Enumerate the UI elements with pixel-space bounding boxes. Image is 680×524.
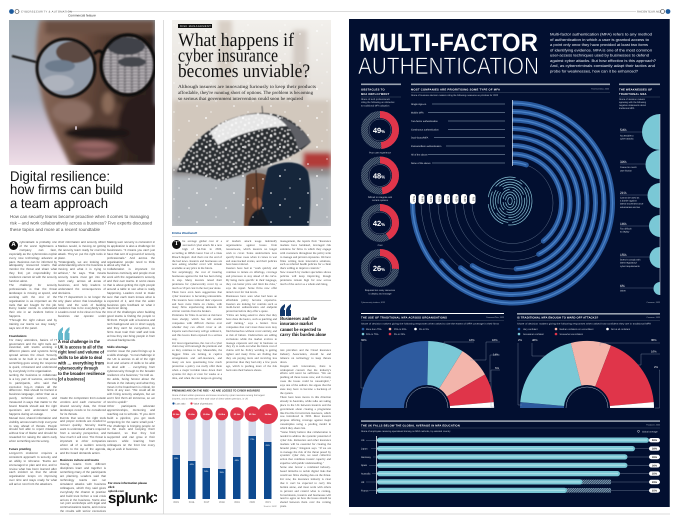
country labels: Japan [361, 448, 368, 450]
confidence description: Share of decision makers giving the following responses when asked how confident they are in traditional MFA [517, 322, 652, 326]
obstacles heading [361, 88, 390, 96]
page header and rules: RACONTEUR.NET [637, 10, 662, 14]
weakness values and descriptions: 6% [620, 284, 625, 288]
weakness values and descriptions: Other [620, 290, 626, 292]
premium values: $1.8bn [219, 413, 226, 416]
quote text: cybersecurity through [58, 366, 98, 371]
priority labels and leader lines [411, 103, 442, 165]
obstacles description: to traditional MFA adoption [361, 104, 390, 108]
obstacles description: Share of tech professionals [361, 98, 391, 101]
middle headline: cyber insurance [178, 46, 278, 66]
middle article column 3 bottom: There have been moves in this direction already in Australia, while talks are taking place in the UK between insurers and the government about creating a programme like Pool Re for terrorism insurance, which was introduced in 1993. Most insurers propose offering coverage against major catastrophes using a pooling model in which they share risk. [280, 395, 331, 430]
weakness values and descriptions: user friction [620, 170, 633, 172]
left article column 1: A [11, 242, 16, 248]
stacked bars [172, 412, 272, 499]
chart title: PREMIUMS ARE ON THE RISE – AS ARE LOSSES TO CYBER INSURERS [172, 388, 260, 392]
quote text: [of a business] [58, 376, 85, 381]
weakness values and descriptions: latest regulatory/ [620, 262, 637, 264]
page header and rules: CYBERSECURITY & AUTOMATION [21, 10, 72, 14]
year axis [173, 501, 271, 504]
priority labels and leader lines: Continuous authentication [411, 128, 439, 132]
weaknesses source: Ponemon, 2022 [647, 301, 660, 304]
middle headline: What happens if [178, 30, 295, 51]
bar value connectors and pills: 56% [652, 439, 658, 442]
left standfirst: these topics and more at a recent roundtable [10, 227, 101, 232]
left article column 2 top [58, 241, 106, 319]
weakness values and descriptions: Cannot be used as [620, 196, 640, 200]
quote text [280, 316, 327, 338]
weaknesses description: agreeing with the following [619, 101, 647, 104]
premium values: $2.1bn [234, 413, 241, 416]
weaknesses description [619, 98, 647, 110]
middle article column 2: "Firms are being asked to show that they have done the basics, such as patching and staff training," says a broker. Now companies that can't meet these tests may find themselves without cover entirely, and at risk of failure. Underwriters are adding exclusions while the market evolves to manage exposure and stay in business as they try to work out what the future cost of claims will be. Policy wording is getting tighter and many firms are finding that they are paying more and receiving less protection than they had only a few years ago, which is pushing more of the risk back onto their balance sheets. [226, 313, 277, 372]
quote mark [280, 304, 291, 316]
middle standfirst: affordable, they're running short of options. The problem is becoming [178, 90, 314, 96]
weakness values and descriptions: 21% [620, 191, 627, 195]
usage callouts [361, 342, 500, 407]
icon: fingerprint [488, 177, 532, 225]
panel: multi-factor authentication infographic [349, 19, 670, 507]
radial bar value pills: 43% [454, 196, 458, 202]
intro text: Multi-factor authentication (MFA) refers to any method [550, 32, 652, 36]
left article column 1: Future proofing [9, 447, 31, 451]
quote text [58, 339, 105, 382]
panel: MFA education by country [361, 420, 660, 494]
year axis: 2016 [189, 501, 195, 504]
loss ratio values: 46% [190, 463, 194, 466]
pull quote: skills [58, 327, 105, 382]
loss ratio values: 48% [235, 459, 239, 462]
education legend: Global average [642, 430, 658, 433]
left article column 1: "Through the right culture and by training our teams we stay ready," says one of the panel. [9, 318, 57, 330]
left standfirst: How can security teams become proactive when it comes to managing [10, 214, 150, 219]
loss ratio values: 34% [204, 470, 208, 473]
left article column 1: Long-term resilience requires a consistent approach to security and an ability to rehearse. Teams are encouraged to plan and test, and to review what has been learned after each incident so that the whole organisation keeps on improving over time and stays ready for what will arrive next from the attackers. [9, 451, 57, 486]
country labels: US [361, 439, 365, 442]
country labels [361, 439, 372, 492]
radial bar value pills: 39% [463, 196, 467, 202]
middle standfirst: so serious that government intervention could soon be required [178, 96, 304, 102]
left headline: Digital resilience: [10, 168, 110, 184]
weaknesses heading: THE WEAKNESSES OF [619, 88, 652, 92]
radial bar value pills: 49% [446, 196, 450, 202]
bar value connectors and pills: 38% [652, 448, 658, 451]
page header and rules: Commercial feature [68, 14, 96, 18]
intro text: And, as cybercriminals constantly adapt their tactics and [550, 64, 655, 68]
pull quote: insurance [280, 300, 331, 344]
priorities source: Ponemon/Okta, 2022 [591, 88, 609, 90]
premium values: $4.8bn [265, 413, 272, 416]
infographic title: MULTI-FACTOR [359, 29, 538, 57]
bar value connectors and pills: 35% [652, 473, 658, 476]
half circles [642, 114, 660, 295]
radial bar value pills: 6% [472, 197, 476, 201]
panel: is traditional MFA enough: Ponemon, 2022 [647, 316, 660, 319]
left article column 2 top: "Strategically, we are looking and understanding where the business is moving and what it is trying to achieve," he says. That means security teams must get into the room early, across all areas of business, and help leaders to understand the consequences of decisions. [58, 260, 106, 295]
weakness values and descriptions: lateral movement once [620, 202, 644, 206]
quote text: insurance market [280, 321, 313, 327]
intro text [550, 32, 656, 74]
donut: resources required: to deploy and manage [369, 292, 392, 296]
usage legend: 25% to 50% [394, 328, 406, 331]
middle standfirst: Although insurers are innovating furiously to keep their products [178, 84, 316, 90]
radial bar chart [412, 103, 612, 303]
middle article column 3 bottom: Despite such innovations, there is widespread concern that the industry's efforts will never be sufficient. "We are pushing all these issues now, and in many cases the losses could be catastrophic," says one of the authors. He argues that the state may have to become a backstop of the system. [280, 364, 331, 395]
panel: use of traditional MFA across organisations: 16% [469, 338, 475, 342]
usage legend [362, 328, 429, 336]
left article column 1: cyberattack is probably one of the worst nightmares a company can face, especially as the cybercrooks exploit every new technology advance at pace. Business can be informed by adequately resourced teams that monitor the threat and share what they find, yet responsibility for resilience cannot sit with the security function alone. [9, 241, 57, 283]
middle article column 2: Insurers have had to "work quickly and continue to iterate on offerings, coverage and processes to stay ahead of the curve. By being more specific in their language, they can better price and limit the risks," says the report. Some firms now offer tiered cover for risk levels. [226, 266, 277, 294]
weakness values and descriptions: 16% [620, 222, 627, 226]
donut: difficult to integrate: Difficult to integrate with [368, 196, 393, 199]
weakness values and descriptions: Too difficult [620, 228, 632, 230]
quote text: cannot be expected to [280, 327, 321, 333]
gap to global average [565, 480, 611, 493]
panel: is traditional MFA enough: 2% [518, 338, 523, 342]
priority labels and leader lines: None of the above [411, 162, 431, 165]
weakness values and descriptions: to deploy [620, 230, 630, 234]
section tag [178, 24, 212, 28]
donut: cost: Cost [378, 244, 383, 247]
priority labels and leader lines: Passwordless authentication [411, 145, 442, 148]
usage heading: THE USE OF TRADITIONAL MFA ACROSS ORGANISATIONS [361, 316, 447, 320]
obstacles heading: MFA DEPLOYMENT [361, 93, 390, 96]
intro text: of identifying evidence. MFA is one of the most common [550, 48, 652, 52]
confidence legend: Very confident [523, 328, 538, 331]
confidence legend: Somewhat unconfident [560, 333, 583, 336]
premium values: $2.7bn [249, 413, 256, 416]
photo: man wearing glasses reflecting code [9, 20, 155, 165]
intro text: user-access techniques used by businesses to defend [550, 54, 649, 58]
premium circles [172, 404, 278, 424]
panel: use of traditional MFA across organisations: 10% [492, 338, 498, 342]
panel: use of traditional MFA across organisations: Ponemon/Okta, 2022 [486, 316, 504, 319]
left article column 3 [107, 241, 155, 451]
weakness values and descriptions: 15% [620, 253, 627, 257]
confidence legend: Not at all confident [611, 328, 630, 331]
quote mark [58, 327, 70, 340]
left standfirst: risk – and work collaboratively across a business? Five experts discussed [10, 220, 153, 226]
weakness values and descriptions: cyber attacks [620, 138, 634, 140]
radial bar value pills: 75% [412, 196, 416, 202]
middle article column 3 bottom: "Some firmly believe that collaboration is needed to address the systemic potential of cyber risk. Reinsurers and other insurance markets will be essential for creating the broader plans," Kingston says. "If we are to manage the risk of the threat posed by systemic cyber risk, we need collective action that combines insurer capacity and expertise with public understanding." [280, 430, 331, 465]
quote text: skills to be able to deal [58, 355, 102, 360]
chart legend: Loss ratio [176, 402, 186, 406]
premium values: $1.6bn [203, 413, 211, 416]
left article column 1 [9, 241, 57, 486]
middle article column 2: Businesses have seen what had been an affordable policy become expensive. Insurers are looking for controls such as multi-factor authentication and endpoint protection before they offer a quote. [226, 294, 277, 313]
panel: companies prioritising MFA [410, 84, 612, 303]
country labels: Australia [361, 472, 371, 475]
donut: difficult to integrate [364, 160, 396, 202]
source: Source: NAIC [264, 505, 277, 508]
loss ratio values: 65% [266, 444, 270, 447]
usage legend: More than 75% [366, 328, 382, 331]
panel: use of traditional MFA across organisations: 5% [495, 366, 500, 370]
radial bar value pills: 59% [438, 196, 442, 202]
sponsor block: splunk [108, 481, 157, 506]
panel: MFA education by country: Proofpoint, 2022 [646, 424, 660, 426]
quote text: carry this burden alone [280, 332, 327, 338]
education heading: THE UK FALLS BELOW THE GLOBAL AVERAGE IN MFA EDUCATION [361, 424, 460, 428]
country labels: Germany [361, 456, 372, 459]
confidence callouts [518, 343, 660, 408]
priority labels and leader lines: Two-factor authentication [411, 120, 438, 123]
premium values: $1.1bn [173, 413, 180, 416]
middle article column 3 top [280, 240, 331, 286]
chart description: insurers, and an estimate of the total value of direct written premium, in US [172, 398, 248, 400]
photo: couple under a snow-covered umbrella [172, 20, 331, 226]
intro text: of authentication in which a user is granted access to [550, 38, 649, 42]
quote text: Businesses and the [280, 316, 318, 322]
left article column 2 bottom [60, 397, 106, 512]
infographic title: AUTHENTICATION [358, 53, 539, 80]
education description: Share of employees receiving specialised training on MFA methods, by selected country [361, 430, 451, 433]
chart: premiums on the rise [172, 386, 278, 508]
middle headline [178, 30, 310, 82]
left headline [10, 168, 123, 211]
donut: cost [364, 208, 396, 247]
panel: weaknesses of traditional MFA [619, 84, 660, 304]
year axis: 2017 [204, 501, 210, 504]
left article column 3: Skills shortage [107, 345, 128, 349]
obstacles heading: OBSTACLES TO [361, 88, 385, 92]
middle article column 3 bottom [280, 349, 331, 508]
left article column 3: Another issue the panel brings up is a skills shortage. "A real challenge in the UK is access to all of the right level and volume of skills to be able to deal with … everything from cybersecurity through to the broader resilience of a business," he told us. [107, 349, 155, 377]
donut: difficult to integrate: current systems [372, 199, 389, 202]
donut: cost: 42% [373, 219, 385, 228]
sponsor note: splunk.com [108, 489, 124, 493]
usage legend: 0% to 5% [419, 328, 429, 331]
weakness values and descriptions: a barrier against [620, 200, 637, 202]
panel: is traditional MFA enough: 2% [654, 365, 659, 369]
horizontal bars [377, 438, 649, 493]
priority labels and leader lines: Dual-factor/MFA [411, 136, 429, 140]
weakness values and descriptions: Cause too much [620, 166, 637, 169]
education legend [638, 430, 658, 433]
country labels: UK [361, 481, 365, 484]
priorities heading: MOST COMPANIES ARE PRIORITISING SOME TYPE OF MFA [411, 88, 500, 92]
loss ratio values [174, 438, 270, 474]
radial bar value pills [410, 194, 476, 204]
bar value connectors and pills [611, 438, 660, 493]
byline: Emma Woollacott [172, 231, 197, 235]
left article column 1: For many attendees, basics of IT governance and the right tools are essential, with teams working in different places and systems being spread across the cloud. Security needs to be built in so that when something goes wrong the response is quick, rehearsed and understood by everybody in the organisation. [9, 338, 57, 373]
left article column 3: One of the challenges when building good teams is finding the people to fill them. People with a business and tech background are in short supply and they can't be everywhere, so firms must train their staff and look at how they can bring people in from unusual backgrounds. [107, 310, 155, 342]
sponsor note [108, 481, 147, 493]
middle article column 3 bottom: Some also favour a combined industry-based initiative to tackle digital risks that would see firms sharing data on the threat. For now, the insurance industry is clear that it can't be expected to carry this burden alone, and must work with others to prevent and control what is coming. Governments, insurers and businesses will need to agree on how the losses should be shared between them over the coming years. [280, 465, 331, 508]
donut: resources required: 26% [373, 264, 385, 273]
weaknesses heading [619, 88, 652, 96]
country labels: France [361, 490, 369, 492]
year axis: 2019 [234, 501, 240, 504]
left article column 1: Foundations [9, 334, 27, 338]
weakness values and descriptions [620, 128, 654, 292]
left headline: how firms can build [10, 181, 123, 197]
weaknesses description: traditional MFA [619, 107, 635, 110]
year axis: 2021 [265, 501, 271, 504]
chart legend: Value of premiums [194, 402, 213, 406]
priority labels and leader lines: Single sign-on [411, 103, 427, 106]
sponsor note: For more information please click [108, 481, 147, 489]
bar value connectors and pills: 36% [652, 464, 658, 467]
premium values: $1.4bn [188, 413, 196, 416]
weaknesses description: negative statements about [619, 104, 646, 107]
weaknesses description: Share of decision makers [619, 98, 646, 101]
donut: poor user experience [364, 114, 396, 154]
middle article column 1 [172, 240, 222, 381]
left article column 3: He adds, being honest about the threats in the industry and what they mean in the boardroom is critical, for firms of any size. "We could all do with hiring security analysts, but we won't find them all tomorrow, so we need to upskill." [107, 377, 155, 404]
intro text: probe for weaknesses, how can it be enhanced? [550, 70, 638, 74]
radial bar value pills: 64% [420, 196, 424, 202]
loss ratio values: 35% [220, 471, 224, 474]
obstacles description: citing the following as obstacles [361, 101, 395, 104]
panel: use of traditional MFA across organisations: 32% [361, 338, 367, 342]
premium values [173, 413, 272, 416]
middle standfirst [178, 84, 316, 102]
country labels: Spain [361, 464, 368, 467]
weakness values and descriptions: 54% [620, 128, 627, 132]
bar value connectors and pills: 36% [652, 456, 658, 459]
donut: poor user experience: 49% [373, 126, 385, 135]
middle article column 1: Premiums for firms in sectors at risk have risen sharply, which has left smaller companies with difficult choices over whether they can afford cover at all. Experts warn that many will go without it, and this leaves them exposed in a serious way. [172, 313, 222, 341]
weakness values and descriptions: Accessible to [620, 134, 634, 138]
left article column 1: The challenge for security professionals is that the threat landscape is moving at speed, and working with the rest of the organisation is as important as the tools that are bought for the job. Every leader needs to understand their role in an incident before it happens. [9, 283, 57, 318]
intro text: against cyber attacks. But how effective is this approach? [550, 59, 656, 63]
left article column 3: Collaboration is important for business continuity and people must work with the organisation's security and their own teams. In some cases that is about getting the right people around a table to see what is really happening. Leaders need to make sure that each team knows what is expected of it, and that the wider business gets feedback on what it has been doing. [107, 267, 155, 310]
middle article column 1: T [174, 241, 178, 247]
semicircle chart: usage [365, 346, 489, 470]
left article column 2 bottom: Business culture and teams [60, 458, 99, 462]
chart description: Share of direct written premiums and losses incurred by cyber insurance among the largest [172, 394, 265, 397]
confidence legend: Neither confident nor unconfident [560, 328, 594, 331]
year axis: 2015 [173, 501, 179, 504]
chart legend [172, 402, 213, 406]
chart description [172, 394, 265, 400]
year axis: 2018 [219, 501, 225, 504]
obstacles source: Cybersecurity Insiders, 2022 [361, 301, 385, 304]
loss ratio values: 73% [250, 438, 254, 441]
priority labels and leader lines: Mobile MFA [411, 112, 424, 114]
middle article column 1: There have even been suggestions that cyber insurance is becoming uninsurable. The insurers have reduced their exposure and have more limits on claims, with many firms experiencing demands for stricter controls from the brokers. [172, 290, 222, 313]
weakness values and descriptions: 30% [620, 160, 627, 164]
intro text: a point only once they have provided at least two items [550, 43, 648, 47]
loss ratio values: 50% [174, 457, 178, 460]
bar value connectors and pills: 28% [652, 481, 658, 484]
panel: obstacles to MFA deployment [361, 84, 401, 304]
middle article column 1: Not surprisingly, the cost of insuring businesses against the risk has been rising in step. Many insurers raised their premiums for cybersecurity cover by as much as 50 per cent in the last year alone. [172, 270, 222, 290]
section tag: RISK MANAGEMENT [180, 25, 211, 28]
left article column 1: Mutual trust, shared information and visibility across teams help everyone to stay ahead of threats. People should feel able to report mistakes without fear of blame and should be rewarded for raising the alarm early when something seems wrong. [9, 416, 57, 443]
donut: resources required: Required too many resources [365, 289, 396, 292]
usage description: Share of decision makers giving the following responses when asked to cite the extent of MFA coverage in their firms [361, 322, 500, 326]
left headline: a team approach [10, 195, 108, 211]
middle article column 3 top: New research by market specialists shows policies will keep improving, though premiums remain high for now across much of the sector as a whole and rising. [280, 270, 331, 286]
weakness values and descriptions: cyber requirements [620, 265, 641, 268]
priority labels and leader lines: All of the above [411, 154, 428, 156]
left article column 3: Other participants advocate apprenticeships, mentoring and reaching out to schools. "If you don't build a pipeline, you get stuck competing for the same small pool." The challenge is bringing people on to the team and keeping them motivated, so that they feel supported and can grow in their careers while learning from colleagues on the front line every day at work in business. [107, 404, 155, 451]
confidence legend [518, 328, 630, 336]
radial bar value pills: 61% [429, 196, 433, 202]
panel: use of traditional MFA across organisations: 14% [493, 352, 499, 356]
left article column 1: Getting the business to collaborate is a key part of success, according to participants, who said that executive buy-in makes all the difference. Risk should be framed in business language, rather than as a purely technical concern, and measured in ways that matter to the board. Boards should ask the right questions and understand what happens during an outage. [9, 373, 57, 416]
weakness values and descriptions: Doesn't comply with [620, 258, 641, 262]
usage legend: 50% to 75% [366, 333, 378, 336]
weaknesses heading: TRADITIONAL MFA [619, 93, 647, 96]
weakness values and descriptions: adversaries are live [620, 206, 641, 209]
obstacles description [361, 98, 395, 108]
middle article column 2 [226, 240, 277, 372]
left standfirst [10, 214, 153, 232]
panel: is traditional MFA enough: 16% [651, 350, 657, 354]
confidence legend: Somewhat confident [523, 333, 544, 336]
bar value connectors and pills: 25% [652, 490, 658, 492]
panel: is traditional MFA enough [517, 313, 660, 466]
donut: difficult to integrate: 48% [373, 172, 385, 180]
panel: use of traditional MFA across organisations [361, 313, 504, 470]
confidence heading: IS TRADITIONAL MFA ENOUGH TO WARD OFF ATTACKS? [517, 316, 599, 320]
donut: resources required [364, 252, 396, 296]
left article column 2 bottom: Events that seize the right tools and proper controls are needed to recover quickly. Security teams want to understand what's required from a security perspective, and how much it will cost. The threat is important to other companies where all of a sudden security comes to the top of the agenda, and the board demands action. [60, 416, 106, 455]
priorities description: Share of business decision makers citing the following measures as priorities for 2022 [411, 94, 499, 97]
semicircle chart: confidence [529, 350, 645, 466]
quote text: A real challenge in the [58, 339, 100, 344]
donut: poor user experience: Poor user experience [369, 152, 392, 154]
panel: is traditional MFA enough: 40% [532, 338, 538, 342]
panel: is traditional MFA enough: 30% [651, 338, 657, 342]
middle headline: becomes unviable? [178, 61, 310, 82]
usage legend: 5% to 25% [394, 333, 405, 336]
year axis: 2020 [250, 501, 256, 504]
infographic title [358, 29, 539, 80]
